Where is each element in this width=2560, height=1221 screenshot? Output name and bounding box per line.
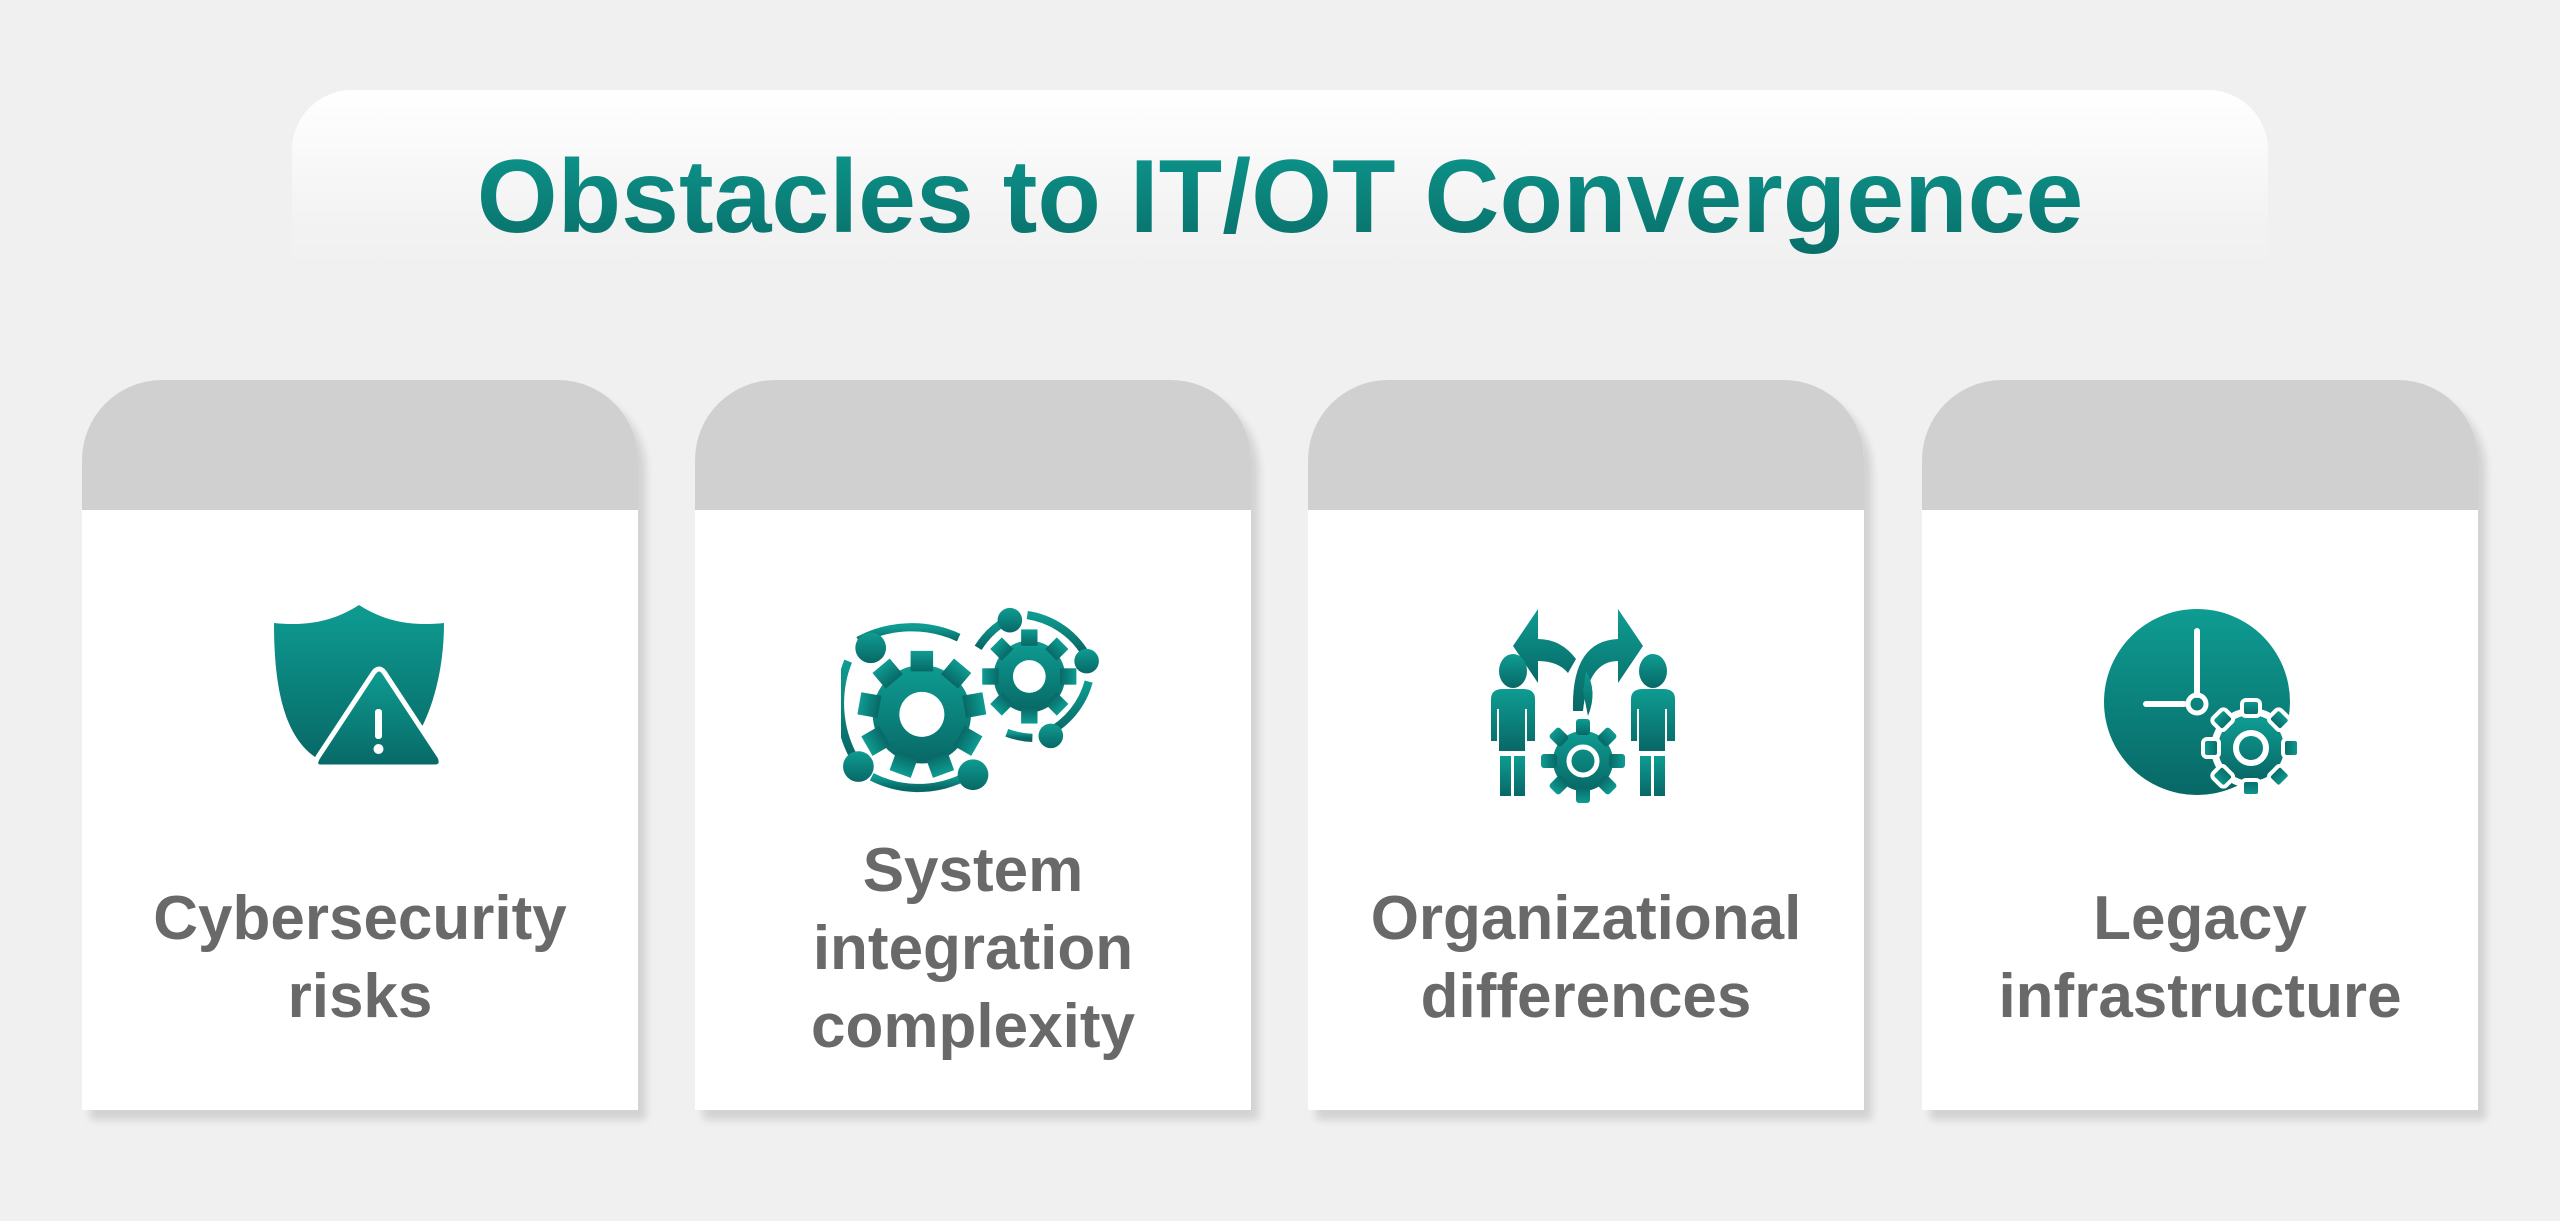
- label: infrastructure: [1998, 962, 2402, 1031]
- icon: clock with gear: [2104, 609, 2297, 795]
- label: [1998, 884, 2402, 1031]
- icon: people with gear and arrows: [1491, 609, 1675, 803]
- label: Organizational: [1371, 884, 1801, 953]
- title: Obstacles to IT/OT Convergence: [477, 139, 2083, 255]
- panel: legacy infrastructure: [1922, 380, 2478, 1110]
- title panel: [292, 90, 2268, 270]
- label: differences: [1421, 962, 1751, 1031]
- label: Legacy: [2093, 884, 2307, 953]
- label: Cybersecurity: [153, 884, 567, 953]
- label: System: [863, 836, 1083, 905]
- panel: organizational differences: [1308, 380, 1864, 1110]
- label: risks: [288, 962, 432, 1031]
- icon: shield warning: [274, 605, 444, 764]
- label: integration: [813, 914, 1133, 983]
- label: [153, 884, 567, 1031]
- icon: gears: [841, 608, 1099, 792]
- label: complexity: [811, 992, 1135, 1061]
- panel: cybersecurity risks: [82, 380, 638, 1110]
- label: [1371, 884, 1801, 1031]
- panel: system integration complexity: [695, 380, 1251, 1110]
- title: [0, 132, 2560, 262]
- label: [811, 836, 1135, 1061]
